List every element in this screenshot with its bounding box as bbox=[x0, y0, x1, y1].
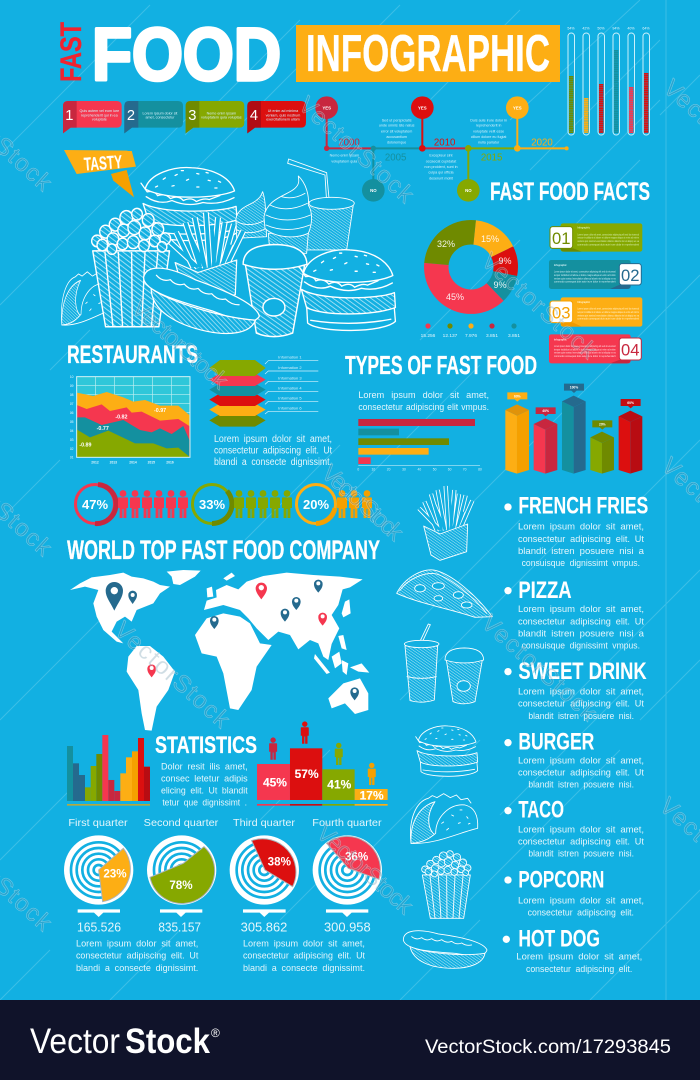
donut legend: 3.851 bbox=[486, 333, 498, 339]
area chart: 04 bbox=[70, 429, 74, 433]
item: sweet drink: consectetur adipiscing elit. Ut bbox=[518, 699, 644, 709]
horizontal bar chart: 0 bbox=[357, 468, 359, 472]
icon: pizza bbox=[397, 570, 492, 617]
area chart: 2013 bbox=[110, 461, 117, 465]
card 01: 01 bbox=[552, 229, 571, 248]
callout 4 bbox=[247, 101, 306, 133]
title: infographic banner bbox=[296, 25, 560, 83]
tube gauges: 94% bbox=[612, 26, 620, 30]
donut legend: 12.137 bbox=[443, 333, 458, 339]
map pin: blue bbox=[292, 597, 301, 610]
watermark: VectorStock bbox=[126, 294, 234, 395]
item: sweet drink: SWEET DRINK bbox=[518, 658, 647, 685]
callout 1: 1 bbox=[65, 108, 73, 124]
sketch: cup bbox=[243, 245, 307, 337]
item: taco bbox=[504, 797, 644, 859]
timeline captions bbox=[330, 118, 507, 180]
icon: burger bbox=[416, 726, 478, 776]
card 03: Infographic bbox=[577, 302, 591, 304]
timeline captions: doloremque bbox=[387, 141, 406, 145]
map pin: red bbox=[147, 664, 156, 677]
card 01: commodo consequat duis aute irure dolor in reprehenderit bbox=[577, 243, 639, 246]
podium chart: 45% bbox=[263, 775, 287, 789]
sketch: drink with straw bbox=[288, 159, 354, 250]
statistics paragraph: elicing elit. Ut blandit bbox=[161, 786, 248, 796]
quarter values bbox=[77, 921, 371, 935]
layered hexagon stack: Information 6 bbox=[278, 405, 302, 410]
donut chart: 32% bbox=[437, 239, 455, 249]
quarter paragraph left: consectetur adipiscing elit. Ut bbox=[76, 951, 199, 961]
sketch: back burger bbox=[141, 168, 237, 241]
callout 3: Nemo enim ipsam bbox=[207, 111, 236, 115]
horizontal bar chart: 70 bbox=[463, 468, 467, 472]
timeline captions: Excepteur sint bbox=[429, 154, 453, 158]
area chart: 02 bbox=[70, 447, 74, 451]
timeline captions: reprehenderit in bbox=[476, 124, 501, 128]
card 04 bbox=[549, 334, 641, 363]
callout 2: Lorem ipsum dolor sit bbox=[143, 111, 177, 115]
yes marker 1: YES bbox=[322, 105, 331, 110]
callout 3 bbox=[186, 101, 244, 133]
card 03: veniam quis nostrud exercitation ullamco laboris nisi ut aliquip ex ea bbox=[577, 314, 640, 317]
tasty ribbon: TASTY bbox=[83, 151, 123, 175]
card 03: commodo consequat duis aute irure dolor in reprehenderit bbox=[577, 318, 639, 321]
quarter labels: Third quarter bbox=[233, 818, 296, 829]
item: popcorn: POPCORN bbox=[518, 866, 604, 893]
gauge: fourth quarter bbox=[313, 835, 382, 905]
layered hexagon stack: Information 4 bbox=[278, 385, 302, 390]
timeline years: 2005 bbox=[385, 152, 406, 163]
card 02: Infographic bbox=[554, 265, 567, 267]
yes marker 3 bbox=[506, 96, 529, 119]
card 03: tempor incididunt ut labore et dolore magna aliqua ut enim ad minim bbox=[577, 311, 639, 314]
area chart: -0.82 bbox=[115, 415, 128, 421]
timeline captions: nulla pariatur bbox=[478, 141, 500, 145]
area chart: -0.89 bbox=[79, 442, 92, 448]
gauge: fourth quarter: 36% bbox=[345, 850, 369, 863]
card 01: tempor incididunt ut labore et dolore magna aliqua ut enim ad minim bbox=[577, 237, 639, 240]
restaurants paragraph bbox=[214, 434, 332, 468]
item: burger bbox=[504, 729, 644, 790]
podium chart: 41% bbox=[327, 778, 352, 792]
area chart: 09 bbox=[70, 384, 74, 388]
callout 1: Quis autem vel eum iure bbox=[80, 109, 119, 113]
right column upper: fries, pizza, drink bbox=[397, 486, 648, 721]
podium chart bbox=[257, 721, 388, 806]
callout 2 bbox=[124, 101, 183, 133]
item: burger: Lorem ipsum dolor sit amet, bbox=[518, 756, 644, 766]
timeline captions: voluptate velit esse bbox=[473, 129, 504, 133]
quarter values: 165.526 bbox=[77, 921, 121, 935]
callout 1: voluptate bbox=[92, 118, 107, 122]
tube gauges: 40% bbox=[627, 26, 635, 30]
area chart: 10 bbox=[70, 375, 74, 379]
callout 2: amet, consectetur bbox=[145, 116, 175, 120]
quarter paragraph right: blandi a consecte dignissimt. bbox=[243, 963, 365, 973]
horizontal bar chart: 10 bbox=[371, 468, 375, 472]
horizontal bar chart: 30 bbox=[402, 468, 406, 472]
no marker 2: NO bbox=[465, 188, 472, 193]
watermark: VectorStock bbox=[109, 616, 236, 734]
quarter paragraph right: consectetur adipiscing elit. Ut bbox=[243, 951, 365, 961]
donut chart: 15% bbox=[481, 234, 499, 244]
statistics paragraph: consec letetur adipis bbox=[161, 774, 248, 784]
callout 4: Ut enim ad minima bbox=[268, 109, 299, 113]
card 04: tempor incididunt ut labore et dolore magna aliqua ut enim ad minim bbox=[554, 348, 616, 351]
ring 33%: 33% bbox=[199, 497, 225, 512]
item: pizza: blandit istren posuere nisi a bbox=[518, 628, 645, 638]
donut legend bbox=[421, 323, 520, 339]
green people bbox=[234, 490, 292, 518]
gauge: third quarter bbox=[230, 835, 299, 905]
item: french fries: blandit istren posuere nisi a bbox=[518, 546, 645, 556]
quarter labels: Second quarter bbox=[144, 818, 219, 829]
3d bar: orange: 60% bbox=[514, 394, 521, 398]
area chart: 07 bbox=[70, 402, 74, 406]
item: pizza: consuisque dignissimt vmpus. bbox=[522, 641, 640, 651]
callouts row bbox=[63, 101, 306, 133]
yes marker 3: YES bbox=[513, 105, 522, 110]
card 04: Infographic bbox=[554, 339, 567, 341]
quarter pie gauges bbox=[64, 818, 382, 973]
timeline captions: deserunt mollit bbox=[429, 176, 453, 180]
timeline captions: culpa qui officia bbox=[428, 171, 455, 175]
ring 47% bbox=[76, 484, 116, 524]
timeline years: 2020 bbox=[531, 138, 553, 149]
map pin: blue bbox=[350, 687, 359, 700]
item: pizza: consectetur adipiscing elit. Ut bbox=[518, 616, 644, 626]
horizontal bar chart: 20 bbox=[387, 468, 391, 472]
map pin: red bbox=[318, 613, 327, 626]
card 02 bbox=[549, 260, 641, 289]
gauge: first quarter bbox=[64, 835, 133, 905]
3d bar: red: 60% bbox=[627, 401, 634, 405]
card 02: 02 bbox=[621, 266, 640, 285]
layered hexagon stack bbox=[209, 355, 318, 427]
item: burger: blandit istren posuere nisi. bbox=[528, 780, 634, 790]
ring 20%: 20% bbox=[303, 497, 329, 512]
icon: french fries bbox=[419, 486, 472, 560]
area chart: 2014 bbox=[129, 461, 137, 465]
quarter labels: Fourth quarter bbox=[312, 818, 382, 829]
heading: statistics: STATISTICS bbox=[155, 732, 257, 759]
gauge: first quarter: 23% bbox=[103, 867, 127, 880]
item: french fries: FRENCH FRIES bbox=[518, 492, 648, 519]
3d bar chart bbox=[505, 384, 642, 474]
tasty ribbon bbox=[64, 150, 136, 197]
item: pizza: Lorem ipsum dolor sit amet, bbox=[518, 604, 644, 614]
area chart: 03 bbox=[70, 438, 74, 442]
footer bar: Vector bbox=[30, 1022, 120, 1061]
layered hexagon stack: Information 2 bbox=[278, 365, 302, 370]
footer bar: VectorStock.com/17293845 bbox=[425, 1037, 671, 1058]
title: FAST: FAST bbox=[55, 22, 88, 82]
timeline captions: error sit voluptatem bbox=[381, 129, 412, 133]
right column lower: burger, taco, popcorn, hot dog bbox=[403, 726, 644, 974]
quarter values: 835.157 bbox=[158, 921, 201, 935]
pink people bbox=[118, 490, 188, 518]
sketch: taco bbox=[61, 272, 114, 325]
timeline captions: Duis aute irure dolor in bbox=[470, 118, 507, 122]
map pin: large blue bbox=[106, 582, 123, 611]
card 03: 03 bbox=[552, 303, 571, 322]
icon: taco bbox=[410, 794, 478, 843]
watermark: VectorStock bbox=[476, 247, 603, 365]
item: french fries: consectetur adipiscing elit. Ut bbox=[518, 534, 644, 544]
map pin: blue bbox=[281, 609, 289, 622]
quarter paragraph left bbox=[76, 939, 199, 973]
callout 4: exercitationem ullam bbox=[266, 118, 300, 122]
item: pizza bbox=[504, 577, 645, 651]
footer bar: Stock bbox=[125, 1022, 210, 1061]
statistics paragraph: Dolor resit ilis amet, bbox=[161, 762, 248, 772]
timeline years: 2010 bbox=[434, 138, 455, 149]
card 04: Lorem ipsum dolor sit amet, consectetur adipiscing elit sed do eiusmod bbox=[554, 345, 616, 348]
watermark: VectorStock bbox=[476, 609, 603, 727]
item: taco: TACO bbox=[518, 797, 564, 824]
watermark: VectorStock bbox=[316, 459, 409, 547]
horizontal bar chart: 40 bbox=[417, 468, 421, 472]
yes marker 2: YES bbox=[418, 105, 427, 110]
item: popcorn: consectetur adipiscing elit. bbox=[528, 907, 634, 917]
timeline captions: cillum dolore eu fugiat bbox=[471, 135, 506, 139]
item: popcorn bbox=[504, 866, 644, 917]
orange people bbox=[337, 490, 372, 518]
area chart: 2012 bbox=[91, 461, 99, 465]
card 01: Infographic bbox=[577, 228, 591, 230]
quarter paragraph right: Lorem ipsum dolor sit amet, bbox=[243, 939, 365, 949]
item: sweet drink: Lorem ipsum dolor sit amet, bbox=[518, 687, 644, 697]
card 02: commodo consequat duis aute irure dolor in reprehenderit bbox=[554, 281, 616, 284]
area chart: 05 bbox=[70, 420, 74, 424]
yes marker 2 bbox=[411, 96, 434, 119]
ring 47%: 47% bbox=[82, 497, 108, 512]
quarter labels: First quarter bbox=[68, 818, 128, 829]
area chart: -0.97 bbox=[154, 408, 166, 414]
area chart: 2016 bbox=[166, 461, 174, 465]
callout 3: voluptatem quia voluptas bbox=[201, 116, 242, 120]
area chart bbox=[70, 375, 190, 465]
item: burger: consectetur adipiscing elit. Ut bbox=[518, 768, 644, 778]
statistics paragraph bbox=[161, 762, 248, 808]
item: burger: BURGER bbox=[518, 729, 594, 756]
3d bar: pink: 40% bbox=[542, 409, 549, 413]
no marker 1 bbox=[362, 179, 385, 202]
card 02: tempor incididunt ut labore et dolore magna aliqua ut enim ad minim bbox=[554, 274, 616, 277]
item: french fries bbox=[504, 492, 648, 568]
podium chart: 17% bbox=[360, 788, 384, 802]
timeline years bbox=[338, 138, 553, 163]
quarter values: 300.958 bbox=[324, 921, 371, 935]
podium chart: 57% bbox=[295, 767, 319, 781]
donut chart bbox=[424, 220, 518, 314]
map pin: blue bbox=[210, 616, 219, 629]
sketch: fries bbox=[169, 212, 243, 305]
layered hexagon stack: Information 5 bbox=[278, 395, 302, 400]
sketch: hot dog bbox=[135, 265, 265, 341]
ring 33% bbox=[192, 484, 232, 524]
restaurants paragraph: blandi a consecte dignissimt. bbox=[214, 457, 332, 468]
footer bar: ® bbox=[211, 1026, 220, 1040]
timeline captions: Nemo enim ipsam bbox=[330, 154, 359, 158]
card 04: commodo consequat duis aute irure dolor in reprehenderit bbox=[554, 355, 616, 358]
area chart: 01 bbox=[70, 455, 74, 459]
sketch: ice cream swirl bbox=[264, 176, 312, 253]
horizontal bar chart bbox=[357, 390, 489, 472]
horizontal bar chart: Lorem ipsum dolor sit amet, bbox=[358, 390, 489, 400]
no marker 2 bbox=[457, 179, 480, 202]
map pin: red bbox=[256, 583, 267, 599]
timeline bbox=[315, 96, 569, 202]
item: popcorn: Lorem ipsum dolor sit amet, bbox=[518, 895, 644, 905]
fact cards bbox=[549, 223, 642, 363]
card 03 bbox=[550, 297, 642, 327]
item: hot dog: consectetur adipiscing elit. bbox=[526, 964, 632, 974]
callout 2: 2 bbox=[127, 108, 135, 124]
callout 1 bbox=[63, 101, 122, 133]
restaurants paragraph: Lorem ipsum dolor sit amet, bbox=[214, 434, 332, 445]
card 04: 04 bbox=[621, 341, 640, 360]
heading: types of fast food: TYPES OF FAST FOOD bbox=[345, 350, 537, 380]
area chart: 08 bbox=[70, 393, 74, 397]
horizontal bar chart: 80 bbox=[478, 468, 482, 472]
horizontal bar chart: 50 bbox=[433, 468, 437, 472]
statistics paragraph: tetur que dignissimt . bbox=[162, 798, 247, 808]
donut chart: 45% bbox=[446, 292, 464, 302]
item: french fries: Lorem ipsum dolor sit amet, bbox=[518, 521, 644, 531]
item: french fries: consuisque dignissimt vmpus. bbox=[522, 558, 640, 568]
timeline captions: non proident, sunt in bbox=[424, 165, 458, 169]
sketch: popcorn bucket bbox=[92, 208, 171, 327]
layered hexagon stack: Information 3 bbox=[278, 375, 302, 380]
quarter values: 305.862 bbox=[241, 921, 287, 935]
horizontal bar chart: 60 bbox=[448, 468, 452, 472]
gauge: third quarter: 38% bbox=[268, 855, 292, 868]
world map bbox=[70, 570, 369, 731]
map pin: blue bbox=[128, 591, 137, 604]
card 02: veniam quis nostrud exercitation ullamco laboris nisi ut aliquip ex ea bbox=[554, 277, 616, 280]
statistics column chart bbox=[67, 735, 150, 806]
donut legend: 7.976 bbox=[465, 333, 477, 339]
timeline years: 2000 bbox=[338, 138, 360, 149]
item: sweet drink bbox=[504, 658, 647, 721]
timeline captions: accusantium bbox=[386, 135, 407, 139]
donut chart: 9% bbox=[493, 280, 507, 290]
timeline captions: Sed ut perspiciatis bbox=[382, 118, 412, 122]
card 01: Lorem ipsum dolor sit amet, consectetur adipiscing elit sed do eiusmod bbox=[577, 233, 640, 236]
watermark: VectorStock bbox=[293, 91, 420, 209]
people share row bbox=[76, 484, 372, 524]
quarter labels bbox=[68, 818, 382, 829]
title: infographic banner: INFOGRAPHIC bbox=[306, 25, 550, 83]
icon: hot dog bbox=[403, 931, 487, 968]
item: sweet drink: blandit istren posuere nisi. bbox=[528, 711, 634, 721]
callout 3: 3 bbox=[188, 108, 196, 124]
gauge: second quarter: 78% bbox=[169, 879, 193, 892]
watermark bbox=[0, 74, 700, 937]
quarter paragraph right bbox=[243, 939, 365, 973]
icon: sweet drinks bbox=[404, 624, 484, 704]
icon: popcorn bbox=[422, 851, 471, 918]
card 04: veniam quis nostrud exercitation ullamco laboris nisi ut aliquip ex ea bbox=[554, 352, 616, 355]
horizontal bar chart: consectetur adipiscing elit vmpus. bbox=[358, 402, 489, 412]
item: hot dog bbox=[503, 925, 642, 974]
tube gauges: 54% bbox=[567, 26, 575, 30]
card 02: Lorem ipsum dolor sit amet, consectetur adipiscing elit sed do eiusmod bbox=[554, 271, 616, 274]
3d bar: teal: 100% bbox=[570, 386, 578, 390]
heading: world top fast food company: WORLD TOP FAST FOOD COMPANY bbox=[67, 535, 380, 565]
gauge: second quarter bbox=[147, 835, 216, 905]
area chart: 06 bbox=[70, 411, 74, 415]
timeline captions: voluptatem quia bbox=[331, 159, 358, 163]
layered hexagon stack: Information 1 bbox=[278, 355, 302, 360]
donut legend: 15.256 bbox=[421, 333, 436, 339]
sketch: front burger bbox=[299, 250, 395, 330]
map pin: blue bbox=[314, 580, 323, 593]
item: taco: blandit istren posuere nisi. bbox=[528, 849, 634, 859]
callout 1: reprehenderit qui in ea bbox=[81, 113, 119, 117]
quarter paragraph left: blandi a consecte dignissimt. bbox=[76, 963, 198, 973]
sketch: small ice cream bbox=[236, 192, 267, 238]
item: taco: consectetur adipiscing elit. Ut bbox=[518, 836, 644, 846]
area chart: 2015 bbox=[148, 461, 155, 465]
value connectors bbox=[78, 909, 368, 917]
timeline years: 2015 bbox=[481, 152, 502, 163]
callout 4: veniam, quis nostrum bbox=[266, 113, 300, 117]
callout 4: 4 bbox=[250, 108, 258, 124]
no marker 1: NO bbox=[370, 188, 377, 193]
tube gauges: 42% bbox=[582, 26, 590, 30]
hero food illustration bbox=[61, 159, 395, 341]
tube gauges: 64% bbox=[642, 26, 650, 30]
donut legend: 3.851 bbox=[508, 333, 520, 339]
restaurants paragraph: consectetur adipiscing elit. Ut bbox=[214, 446, 332, 456]
quarter paragraph left: Lorem ipsum dolor sit amet, bbox=[76, 939, 198, 949]
heading: restaurants: RESTAURANTS bbox=[67, 341, 198, 369]
area chart: -0.77 bbox=[97, 426, 109, 432]
timeline captions: unde omnis iste natus bbox=[379, 124, 415, 128]
donut chart: 9% bbox=[498, 256, 512, 266]
yes marker 1 bbox=[315, 96, 338, 119]
card 01 bbox=[550, 223, 642, 252]
card 01: veniam quis nostrud exercitation ullamco laboris nisi ut aliquip ex ea bbox=[577, 240, 640, 243]
tube gauges bbox=[567, 26, 650, 135]
title: FOOD: FOOD bbox=[92, 13, 281, 96]
item: taco: Lorem ipsum dolor sit amet, bbox=[518, 824, 644, 834]
item: hot dog: Lorem ipsum dolor sit amet, bbox=[516, 952, 642, 962]
footer bar bbox=[0, 1000, 700, 1080]
3d bar: green: 20% bbox=[599, 422, 606, 426]
watermark: VectorStock bbox=[311, 819, 419, 920]
card 03: Lorem ipsum dolor sit amet, consectetur adipiscing elit sed do eiusmod bbox=[577, 308, 640, 311]
timeline captions: occaecat cupidatat bbox=[426, 159, 456, 163]
ring 20% bbox=[296, 484, 336, 524]
tube gauges: 50% bbox=[597, 26, 605, 30]
item: hot dog: HOT DOG bbox=[518, 925, 600, 952]
item: pizza: PIZZA bbox=[518, 577, 572, 604]
